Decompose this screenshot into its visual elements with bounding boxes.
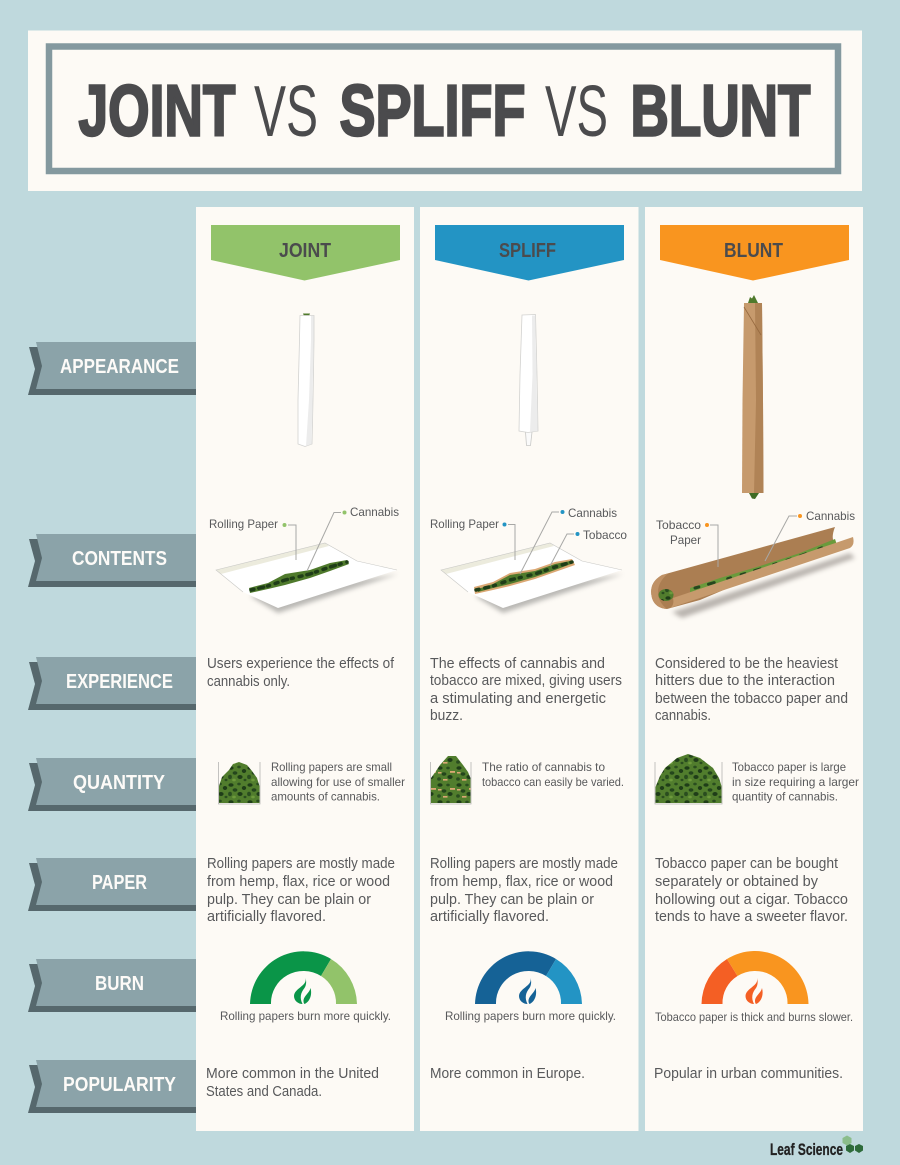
callout: rolling paper: Rolling Paper	[430, 517, 499, 531]
illustration: spliff	[519, 314, 538, 446]
text: spliff experience	[430, 656, 622, 724]
callout: cannabis: Cannabis	[350, 505, 399, 519]
text: joint paper: artificially flavored.	[207, 909, 326, 925]
caption: blunt burn: Tobacco paper is thick and burns slower.	[655, 1010, 853, 1024]
header: joint	[211, 225, 400, 280]
text: blunt experience	[655, 656, 848, 724]
icon: blunt cannabis heap	[655, 754, 722, 804]
ribbon: experience	[28, 657, 196, 710]
text: joint experience: cannabis only.	[207, 674, 290, 690]
ribbon: popularity	[28, 1060, 196, 1113]
text: joint quantity	[271, 760, 405, 804]
illustration: blunt	[742, 295, 764, 499]
gauge: joint burn	[250, 951, 357, 1004]
text: joint popularity	[206, 1066, 379, 1100]
callout: tobacco	[550, 528, 627, 566]
text: joint paper: pulp. They can be plain or	[207, 892, 371, 908]
text: joint experience: Users experience the effects of	[207, 656, 395, 672]
ribbon: paper	[28, 858, 196, 911]
icon: spliff mixed heap	[430, 756, 471, 804]
callout: cannabis	[520, 506, 617, 574]
header: spliff: SPLIFF	[499, 240, 556, 262]
text: blunt quantity: in size requiring a larger	[732, 775, 859, 789]
ribbon: burn	[28, 959, 196, 1012]
callout: tobacco paper	[656, 518, 718, 567]
logo: leaf science: Leaf Science	[770, 1140, 843, 1159]
ribbon: experience: EXPERIENCE	[66, 671, 173, 693]
text: blunt popularity: Popular in urban communities.	[654, 1066, 843, 1082]
title: SPLIFF	[340, 72, 526, 152]
text: spliff paper: from hemp, flax, rice or wood	[430, 874, 613, 890]
header: spliff	[435, 225, 624, 280]
illustration: joint	[298, 314, 314, 446]
text: blunt quantity	[732, 760, 859, 804]
text: blunt quantity: Tobacco paper is large	[732, 760, 846, 774]
callout: rolling paper	[430, 517, 515, 560]
text: joint experience	[207, 656, 395, 690]
text: blunt paper: tends to have a sweeter flavor.	[655, 909, 848, 925]
title banner	[28, 30, 862, 191]
text: blunt experience: cannabis.	[655, 708, 711, 724]
icon: flame	[746, 978, 763, 1004]
text: blunt quantity: quantity of cannabis.	[732, 790, 838, 804]
text: spliff experience: tobacco are mixed, giving users	[430, 673, 622, 689]
icon: flame	[294, 978, 311, 1004]
callout: rolling paper	[209, 517, 296, 560]
ribbon: appearance	[28, 342, 196, 395]
text: blunt paper: hollowing out a cigar. Tobacco	[655, 892, 848, 908]
callout: tobacco: Tobacco	[583, 528, 627, 542]
ribbon: paper: PAPER	[92, 872, 147, 894]
caption: joint burn: Rolling papers burn more quickly.	[220, 1009, 391, 1023]
text: blunt experience: between the tobacco paper and	[655, 691, 848, 707]
column panels	[196, 207, 863, 1131]
text: blunt paper: Tobacco paper can be bought	[655, 856, 838, 872]
ribbon: contents: CONTENTS	[72, 548, 167, 570]
text: spliff experience: a stimulating and energetic	[430, 691, 606, 707]
text: spliff paper: pulp. They can be plain or	[430, 892, 594, 908]
gauge: spliff burn	[475, 951, 582, 1004]
callout: cannabis: Cannabis	[568, 506, 617, 520]
illustration: joint rolling paper and cannabis	[216, 543, 398, 613]
text: spliff experience: buzz.	[430, 708, 463, 724]
text: joint quantity: allowing for use of smaller	[271, 775, 405, 789]
ribbon: burn: BURN	[95, 973, 144, 995]
title: VS	[254, 72, 318, 152]
ribbon: appearance: APPEARANCE	[60, 356, 179, 378]
gauge: blunt burn	[702, 951, 808, 1004]
text: joint paper: Rolling papers are mostly made	[207, 856, 395, 872]
ribbon: quantity: QUANTITY	[73, 772, 166, 794]
text: joint paper: from hemp, flax, rice or wood	[207, 874, 390, 890]
caption: spliff burn: Rolling papers burn more quickly.	[445, 1009, 616, 1023]
header: blunt	[660, 225, 849, 280]
ribbon: contents	[28, 534, 196, 587]
illustration: spliff rolling paper and mix	[441, 543, 623, 613]
callout: tobacco paper: Tobacco	[656, 518, 701, 532]
callout: cannabis	[765, 509, 855, 561]
text: spliff quantity: The ratio of cannabis to	[482, 760, 605, 774]
title	[78, 72, 811, 152]
text: spliff quantity	[482, 760, 624, 789]
ribbon: quantity	[28, 758, 196, 811]
text: spliff paper: artificially flavored.	[430, 909, 549, 925]
callout: rolling paper: Rolling Paper	[209, 517, 278, 531]
text: spliff popularity: More common in Europe.	[430, 1066, 585, 1082]
illustration: tobacco paper tube	[651, 527, 855, 618]
callout: cannabis	[307, 505, 399, 571]
text: blunt paper: separately or obtained by	[655, 874, 819, 890]
title: BLUNT	[630, 72, 811, 152]
text: joint quantity: Rolling papers are small	[271, 760, 392, 774]
text: blunt paper	[655, 856, 848, 925]
text: spliff paper: Rolling papers are mostly made	[430, 856, 618, 872]
icon: flame	[519, 978, 536, 1004]
title: VS	[545, 72, 608, 152]
text: joint quantity: amounts of cannabis.	[271, 790, 380, 804]
text: blunt experience: Considered to be the heaviest	[655, 656, 838, 672]
callout: cannabis: Cannabis	[806, 509, 855, 523]
callout: tobacco paper: Paper	[670, 533, 701, 547]
text: spliff experience: The effects of cannabis and	[430, 656, 605, 672]
text: joint paper	[207, 856, 395, 925]
icon: joint cannabis heap	[218, 762, 260, 804]
text: joint popularity: More common in the United	[206, 1066, 379, 1082]
text: spliff paper	[430, 856, 618, 925]
header: joint: JOINT	[279, 240, 331, 262]
header: blunt: BLUNT	[724, 240, 783, 262]
ribbon: popularity: POPULARITY	[63, 1074, 177, 1096]
text: spliff quantity: tobacco can easily be varied.	[482, 775, 624, 789]
text: blunt experience: hitters due to the interaction	[655, 673, 835, 689]
text: joint popularity: States and Canada.	[206, 1084, 322, 1100]
title: JOINT	[78, 72, 236, 152]
